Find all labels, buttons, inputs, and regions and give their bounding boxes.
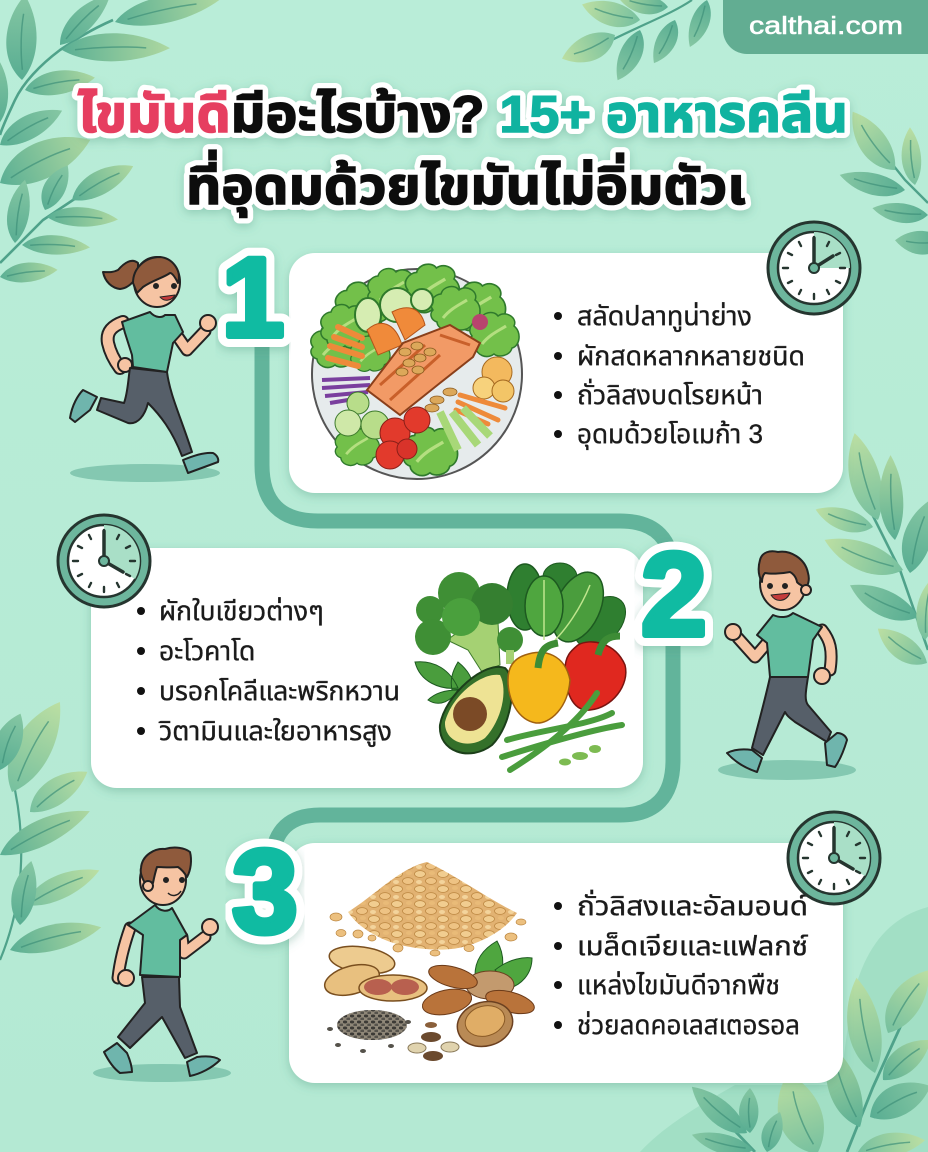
clock 3 — [788, 812, 880, 904]
decorative blob: bottom right — [640, 907, 928, 1152]
title: ที่อุดมด้วยไขมันไม่อิ่มตัวเ — [186, 150, 746, 217]
bullet list: ผักใบเขียวต่างๆ — [159, 596, 324, 626]
bullet list: ถั่วลิสงและอัลมอนด์ — [577, 890, 808, 921]
leaves: top left — [0, 0, 222, 285]
number 2: 2 — [641, 529, 707, 661]
panel: step 2 — [91, 548, 643, 788]
panel: step 1 — [289, 253, 843, 493]
connector path — [262, 320, 673, 860]
number 1: 1 — [222, 235, 284, 360]
runner: woman jogging — [70, 257, 220, 482]
runner: man walking — [718, 551, 856, 780]
bullet list: อุดมด้วยโอเมก้า 3 — [577, 419, 763, 450]
illustration: salmon salad plate — [311, 264, 522, 479]
number 3: 3 — [232, 826, 298, 958]
leaves: left lower — [0, 692, 104, 961]
number 1: 1 — [222, 235, 284, 360]
number 3: 3 — [232, 826, 298, 958]
bullet list — [137, 596, 400, 747]
runner: man jogging — [93, 848, 231, 1082]
leaves: bottom right — [683, 961, 928, 1152]
website tab: calthai.com — [749, 12, 903, 40]
bullet list: ผักสดหลากหลายชนิด — [577, 341, 805, 371]
leaves: right middle — [812, 430, 928, 674]
clock 1 — [768, 222, 860, 314]
website tab — [723, 0, 928, 54]
leaves: top right — [557, 0, 717, 85]
illustration: nuts and seeds — [321, 862, 537, 1061]
title: ที่อุดมด้วยไขมันไม่อิ่มตัวเ — [186, 150, 746, 217]
bullet list — [554, 301, 805, 450]
bullet list: แหล่งไขมันดีจากพืช — [577, 970, 780, 1000]
leaves: right upper — [837, 105, 928, 255]
bullet list: วิตามินและใยอาหารสูง — [158, 716, 392, 747]
bullet list: อะโวคาโด — [159, 636, 255, 666]
bullet list: ถั่วลิสงบดโรยหน้า — [577, 379, 763, 410]
panel: step 3 — [289, 843, 843, 1083]
title: ไขมันดีมีอะไรบ้าง? 15+ อาหารคลีน — [78, 86, 848, 144]
number 2: 2 — [641, 529, 707, 661]
illustration: vegetables — [415, 563, 635, 770]
bullet list: บรอกโคลีและพริกหวาน — [159, 676, 400, 706]
bullet list — [554, 890, 809, 1040]
bullet list: สลัดปลาทูน่าย่าง — [577, 301, 752, 332]
clock 2 — [58, 515, 150, 607]
bullet list: ช่วยลดคอเลสเตอรอล — [577, 1010, 800, 1040]
title — [78, 86, 848, 217]
bullet list: เมล็ดเจียและแฟลกซ์ — [577, 931, 809, 961]
title: ไขมันดีมีอะไรบ้าง? 15+ อาหารคลีน — [78, 86, 848, 144]
